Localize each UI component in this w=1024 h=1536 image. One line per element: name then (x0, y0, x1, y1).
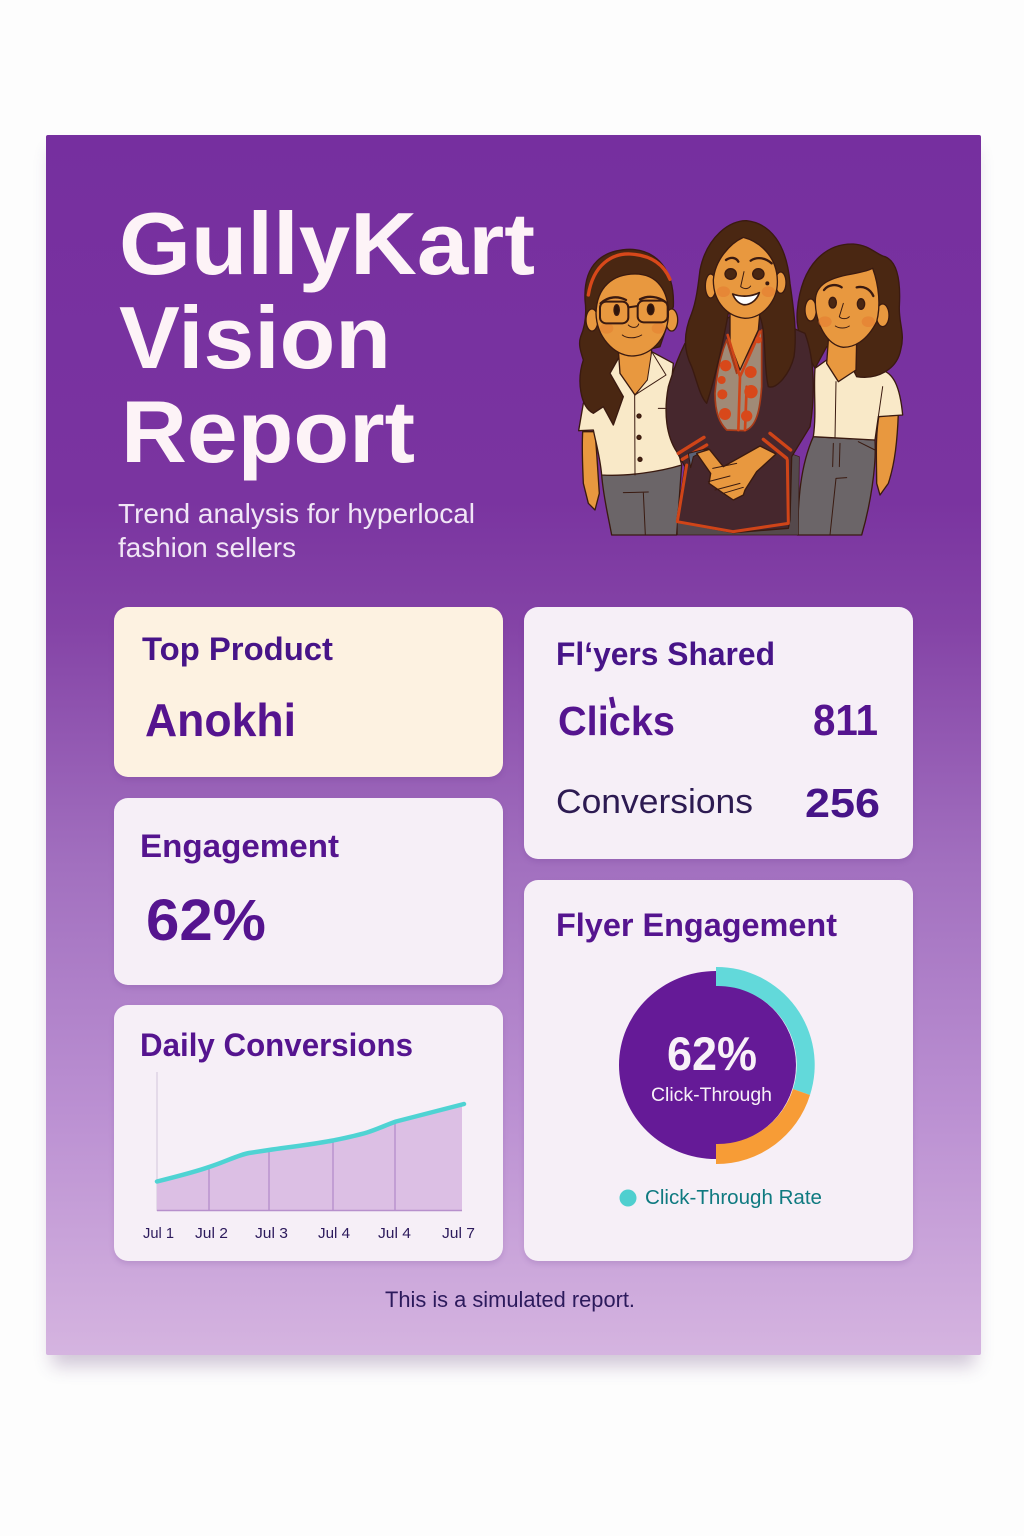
title (119, 194, 535, 481)
card: flyers shared (524, 607, 913, 859)
area line chart (143, 1072, 475, 1242)
title: Report (121, 382, 415, 481)
chart axis labels: Jul 2 (195, 1226, 228, 1242)
chart axis labels: Jul 7 (442, 1226, 475, 1242)
subtitle: fashion sellers (118, 532, 296, 563)
donut chart (619, 967, 815, 1164)
title: Vision (119, 288, 391, 387)
center woman (666, 221, 813, 535)
right woman (797, 244, 903, 535)
illustration: three women (578, 220, 904, 536)
title: GullyKart (119, 194, 535, 293)
card: flyer engagement (524, 880, 913, 1261)
poster background panel (46, 135, 981, 1355)
flyers shared heading: Fl‘yers Shared (556, 636, 775, 672)
chart axis labels (143, 1226, 475, 1242)
subtitle (118, 498, 475, 563)
daily conversions heading: Daily Conversions (140, 1027, 413, 1063)
footer note: This is a simulated report. (385, 1287, 635, 1312)
subtitle: Trend analysis for hyperlocal (118, 498, 475, 529)
card: top product (114, 607, 503, 777)
conversions label: Conversions (556, 783, 753, 821)
clicks label: Clicks (558, 698, 675, 744)
top product label: Top Product (142, 631, 333, 667)
left woman (579, 249, 682, 535)
card: daily conversions (114, 1005, 503, 1261)
flyer engagement heading: Flyer Engagement (556, 907, 837, 943)
top product value: Anokhi (145, 694, 296, 746)
chart axis labels: Jul 4 (318, 1226, 350, 1242)
engagement value: 62% (146, 888, 266, 953)
conversions value: 256 (805, 780, 880, 826)
chart axis labels: Jul 4 (378, 1226, 411, 1242)
chart axis labels: Jul 1 (143, 1226, 174, 1242)
chart axis labels: Jul 3 (255, 1226, 288, 1242)
legend: Click-Through Rate (645, 1187, 822, 1209)
donut center value: 62% (667, 1027, 757, 1080)
clicks value: 811 (813, 696, 878, 745)
card: engagement (114, 798, 503, 985)
donut center label: Click-Through (651, 1084, 772, 1106)
engagement label: Engagement (140, 828, 339, 864)
